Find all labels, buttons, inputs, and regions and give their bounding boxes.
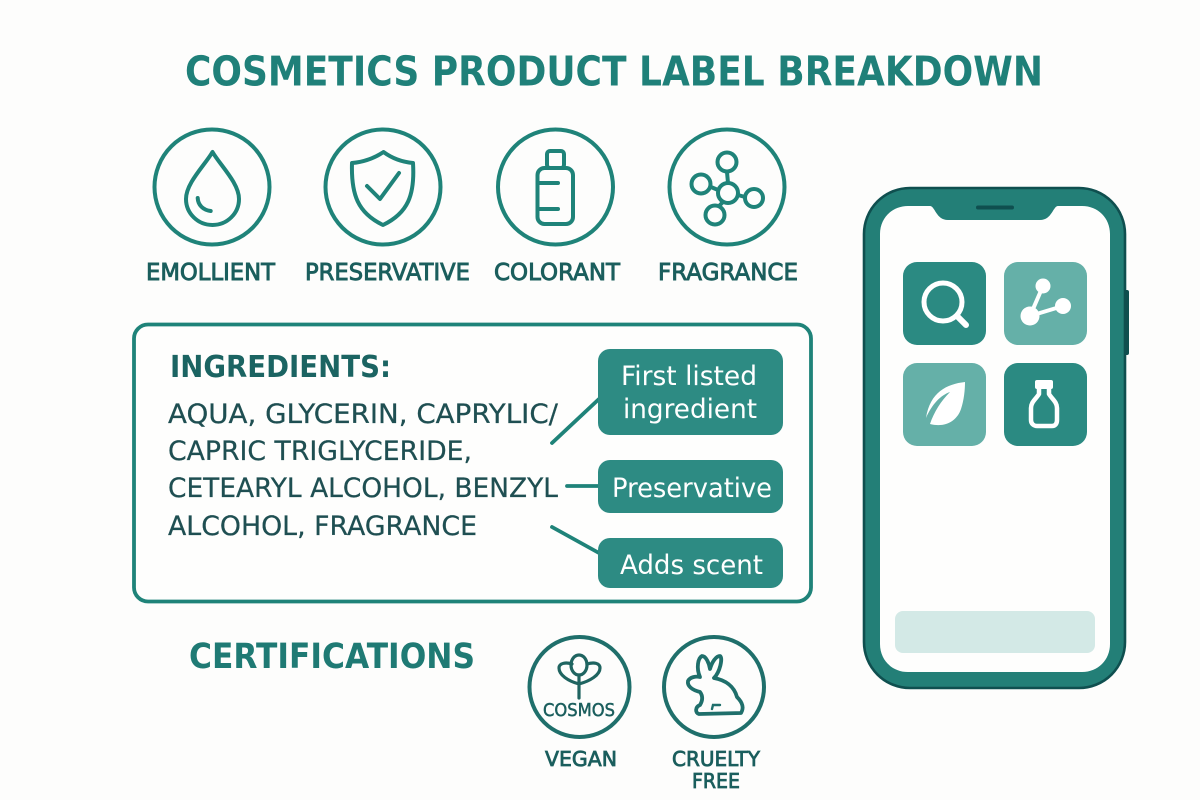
ingredient list <box>168 399 559 542</box>
icon: colorant bottle <box>498 130 613 244</box>
callout: first listed ingredient <box>598 349 783 435</box>
callout connector: first listed <box>552 399 599 443</box>
badge: vegan cosmos: COSMOS <box>543 700 615 721</box>
app icon: molecule <box>1004 262 1087 345</box>
app icon: leaf <box>903 363 986 446</box>
panel: ingredients <box>134 324 811 602</box>
ingredient function icons <box>146 130 798 286</box>
app icon: bottle <box>1004 363 1087 446</box>
title: COSMETICS PRODUCT LABEL BREAKDOWN <box>185 48 1043 96</box>
callout: first listed ingredient: ingredient <box>623 394 757 425</box>
label: cruelty free <box>672 747 760 793</box>
phone mockup <box>864 188 1129 688</box>
callout: first listed ingredient: First listed <box>621 361 757 392</box>
label: vegan: VEGAN <box>545 747 617 771</box>
heading: certifications: CERTIFICATIONS <box>189 637 475 677</box>
label: emollient: EMOLLIENT <box>146 258 276 286</box>
badge: vegan cosmos <box>530 637 630 737</box>
label: fragrance: FRAGRANCE <box>658 258 798 286</box>
ingredient list: AQUA, GLYCERIN, CAPRYLIC/ <box>168 399 559 430</box>
app icon: search <box>903 262 986 345</box>
ingredient list: CETEARYL ALCOHOL, BENZYL <box>168 473 558 504</box>
icon: preservative shield <box>326 130 440 244</box>
ingredient list: ALCOHOL, FRAGRANCE <box>168 511 477 542</box>
phone body <box>864 188 1125 688</box>
ingredient list: CAPRIC TRIGLYCERIDE, <box>168 436 472 467</box>
label: cruelty free: CRUELTY <box>672 747 760 771</box>
side button <box>1123 290 1129 355</box>
icon: emollient water drop <box>154 130 270 244</box>
badge: cruelty free rabbit <box>664 637 764 737</box>
speaker <box>976 206 1014 210</box>
callout connector: preservative <box>567 484 599 488</box>
callout: adds scent: Adds scent <box>620 550 763 581</box>
callout: preservative <box>598 460 783 513</box>
icon: fragrance molecule <box>670 130 784 244</box>
callout: preservative: Preservative <box>612 473 772 504</box>
label: colorant: COLORANT <box>494 258 621 286</box>
heading: ingredients: INGREDIENTS: <box>170 350 391 385</box>
label: cruelty free: FREE <box>692 769 740 793</box>
phone screen <box>880 206 1110 672</box>
search bar <box>895 611 1095 653</box>
callout: adds scent <box>598 538 783 588</box>
label: preservative: PRESERVATIVE <box>305 258 470 286</box>
callout connector: scent <box>552 527 599 553</box>
